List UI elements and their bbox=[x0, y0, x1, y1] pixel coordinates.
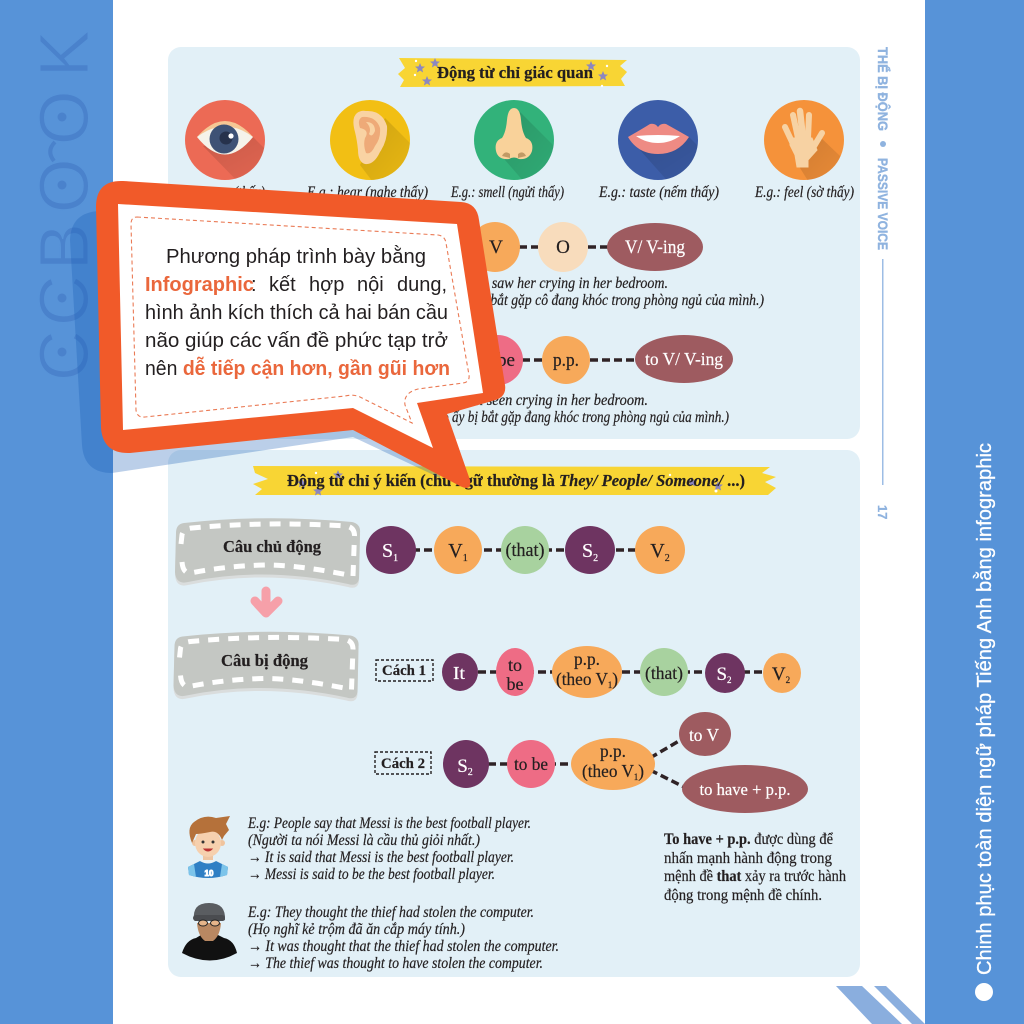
formula: active opinion sentence: 1 bbox=[463, 553, 468, 564]
example block: thief: → It was thought that the thief had stolen the computer. bbox=[248, 938, 559, 955]
formula: passive way 2: ) bbox=[638, 761, 644, 782]
CCBOOK vertical logo: C bbox=[25, 275, 103, 326]
callout text: hình ảnh kích thích cả hai bán cầu bbox=[145, 302, 448, 324]
example block: thief: E.g: They thought the thief had stolen the computer. bbox=[247, 904, 534, 921]
callout text: hợp bbox=[309, 274, 344, 296]
formula: passive way 1 bbox=[376, 646, 801, 698]
formula: active opinion sentence: V bbox=[650, 540, 665, 562]
note: to have + p.p. bbox=[664, 831, 846, 904]
example: passive sense sentence: She has been seen crying in her bedroom. bbox=[408, 392, 648, 409]
sense caption: feel: E.g.: feel (sờ thấy) bbox=[754, 184, 854, 201]
callout text: : bbox=[251, 274, 257, 296]
sense caption: smell: E.g.: smell (ngửi thấy) bbox=[450, 184, 564, 201]
icon: footballer boy: 10 bbox=[205, 869, 214, 878]
callout text: nên dễ tiếp cận hơn, gần gũi hơn bbox=[145, 356, 450, 380]
icon: ear bbox=[330, 100, 410, 180]
formula: passive way 1: (theo V bbox=[556, 669, 610, 689]
formula: passive sense verb bbox=[473, 335, 733, 385]
formula: active sense verb: O bbox=[556, 237, 570, 258]
corner stripes bbox=[836, 986, 925, 1024]
panel: sensory verbs bbox=[168, 47, 860, 439]
formula: passive way 2: p.p. bbox=[600, 741, 626, 761]
example block: Messi: E.g: People say that Messi is the best football player. bbox=[247, 815, 531, 832]
panel: opinion verbs bbox=[168, 450, 860, 977]
label: passive sentence: Câu bị động bbox=[221, 651, 308, 670]
formula: passive way 2: to have + p.p. bbox=[700, 780, 790, 799]
formula: passive sense verb: to V/ V-ing bbox=[645, 349, 723, 369]
callout text: não giúp các vấn đề phức tạp trở bbox=[145, 330, 448, 352]
sense caption: hear: E.g.: hear (nghe thấy) bbox=[306, 184, 428, 201]
callout text: nội bbox=[357, 274, 384, 296]
formula: active opinion sentence: S bbox=[582, 540, 593, 562]
formula: passive sense verb: be bbox=[497, 350, 515, 371]
formula: passive way 1: ) bbox=[612, 669, 618, 690]
CCBOOK vertical logo: O bbox=[25, 159, 103, 213]
label: active sentence bbox=[175, 518, 360, 588]
running header: rule bbox=[882, 259, 884, 485]
right blue band bbox=[925, 0, 1024, 1024]
left blue band bbox=[0, 0, 113, 1024]
label: active sentence: Câu chủ động bbox=[223, 537, 321, 556]
note: to have + p.p.: nhấn mạnh hành động trong bbox=[664, 850, 832, 867]
formula: active opinion sentence: 1 bbox=[393, 553, 398, 564]
icon: thief bbox=[182, 903, 237, 960]
example: passive sense sentence: (Cô ấy bị bắt gặp đang khóc trong phòng ngủ của mình.) bbox=[429, 409, 729, 426]
callout shadow bbox=[70, 211, 440, 478]
example: active sense sentence: (Anh ấy bắt gặp cô đang khóc trong phòng ngủ của mình.) bbox=[444, 292, 764, 309]
CCBOOK vertical logo bbox=[25, 30, 103, 381]
icon: lips bbox=[618, 100, 698, 180]
formula: passive way 2: 2 bbox=[468, 767, 473, 778]
banner: opinion verbs heading bbox=[253, 466, 776, 496]
formula: active opinion sentence: (that) bbox=[506, 540, 544, 561]
formula: passive way 1: 2 bbox=[727, 675, 732, 685]
callout text: kết bbox=[269, 274, 296, 296]
callout text: Phương pháp trình bày bằng bbox=[166, 245, 426, 268]
formula: active opinion sentence bbox=[366, 526, 685, 574]
example block: Messi: → It is said that Messi is the best football player. bbox=[248, 849, 514, 866]
formula: passive way 1: V bbox=[772, 664, 786, 685]
formula: passive way 1: Cách 1 bbox=[382, 663, 426, 679]
banner: sensory verbs heading: Động từ chỉ giác quan bbox=[437, 63, 594, 82]
callout text bbox=[145, 245, 450, 380]
example block: thief: (Họ nghĩ kẻ trộm đã ăn cắp máy tính.) bbox=[248, 921, 465, 938]
formula: passive way 1: p.p. bbox=[574, 649, 600, 669]
label: passive sentence bbox=[174, 632, 359, 701]
formula: passive way 1: 1 bbox=[608, 680, 612, 690]
example: active sense sentence: He saw her crying in her bedroom. bbox=[471, 275, 668, 292]
arrow: active to passive bbox=[255, 591, 278, 613]
example block: Messi: → Messi is said to be the best football player. bbox=[248, 866, 495, 883]
formula: passive way 2 bbox=[375, 712, 808, 813]
formula: passive way 2: S bbox=[457, 756, 468, 777]
example block: Messi bbox=[247, 815, 531, 883]
page number: 17 bbox=[875, 505, 890, 519]
formula: active opinion sentence: 2 bbox=[665, 553, 670, 564]
formula: passive way 1: to bbox=[508, 655, 522, 675]
CCBOOK vertical logo: O bbox=[25, 91, 103, 145]
sense caption: taste: E.g.: taste (nếm thấy) bbox=[598, 184, 719, 201]
formula: active sense verb: V bbox=[489, 237, 503, 258]
running header: section title bbox=[875, 47, 890, 250]
formula: active sense verb: V/ V-ing bbox=[625, 237, 685, 258]
callout text: Infographic bbox=[145, 274, 254, 296]
note: to have + p.p.: động trong mệnh đề chính. bbox=[664, 887, 822, 904]
icon: footballer boy bbox=[188, 816, 230, 878]
formula: passive sense verb: p.p. bbox=[553, 350, 579, 371]
formula: passive way 1: It bbox=[453, 663, 465, 683]
running header: section title: PASSIVE VOICE bbox=[875, 158, 890, 250]
icon: eye bbox=[185, 100, 265, 180]
sense caption: see: E.g.: see (thấy) bbox=[184, 184, 265, 201]
example: passive sense sentence bbox=[408, 392, 729, 426]
formula: passive way 2: Cách 2 bbox=[381, 756, 425, 772]
example block: thief: → The thief was thought to have stolen the computer. bbox=[248, 955, 543, 972]
note: to have + p.p.: mệnh đề that xảy ra trước hành bbox=[664, 868, 846, 885]
example block: thief bbox=[247, 904, 559, 972]
CCBOOK vertical logo: K bbox=[25, 30, 103, 77]
icon: hand bbox=[764, 100, 844, 180]
example block: Messi: (Người ta nói Messi là cầu thủ giỏi nhất.) bbox=[248, 832, 480, 849]
formula: passive way 2: to V bbox=[689, 725, 719, 745]
note: to have + p.p.: To have + p.p. được dùng để bbox=[664, 831, 834, 848]
formula: passive way 2: to be bbox=[514, 754, 548, 774]
formula: active opinion sentence: S bbox=[382, 540, 393, 562]
formula: active opinion sentence: V bbox=[448, 540, 463, 562]
formula: passive way 2: 1 bbox=[634, 772, 638, 782]
CCBOOK vertical logo: C bbox=[25, 330, 103, 381]
formula: active sense verb bbox=[470, 222, 703, 272]
callout text: dung, bbox=[397, 274, 447, 296]
running header: section title: THỂ BỊ ĐỘNG bbox=[875, 47, 890, 131]
callout: infographic method bbox=[96, 181, 505, 488]
CCBOOK vertical logo: B bbox=[25, 223, 103, 270]
banner: opinion verbs heading: Động từ chỉ ý kiến (chủ ngữ thường là They/ People/ Someone/ ...) bbox=[287, 471, 745, 490]
formula: passive way 1: (that) bbox=[645, 663, 683, 684]
book tagline: Chinh phục toàn diện ngữ pháp Tiếng Anh bằng infographic bbox=[973, 443, 996, 975]
formula: passive way 1: be bbox=[506, 674, 524, 694]
formula: passive way 2: (theo V bbox=[582, 761, 636, 781]
formula: passive way 1: 2 bbox=[786, 675, 790, 685]
formula: active opinion sentence: 2 bbox=[593, 553, 598, 564]
icon: nose bbox=[474, 100, 554, 180]
example: active sense sentence bbox=[444, 275, 764, 309]
banner: sensory verbs heading bbox=[398, 58, 627, 87]
formula: passive way 1: S bbox=[716, 664, 727, 685]
